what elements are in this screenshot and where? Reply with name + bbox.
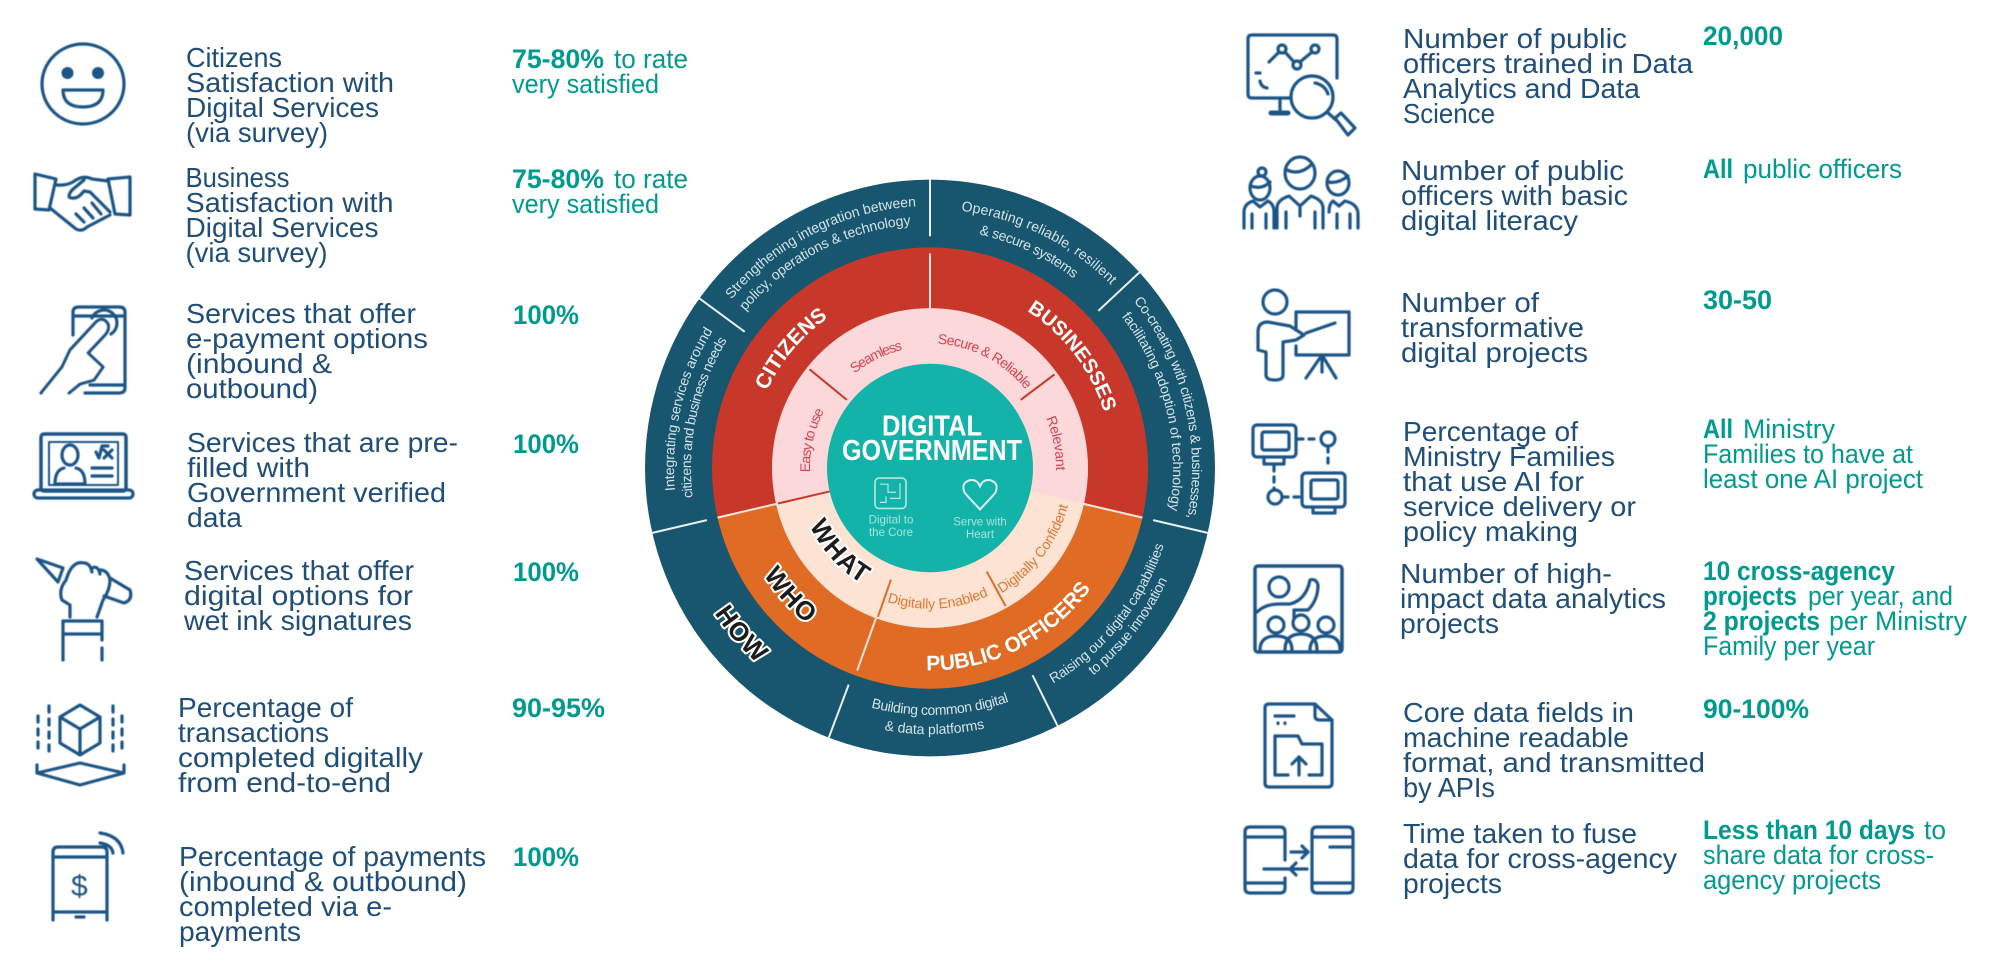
labels: what ring qualities: Easy to use	[800, 409, 823, 472]
value: less than 10 days: share data for cross-	[1703, 840, 1934, 870]
labels: navy ring how statements: Co-creating with citizens & businesses,	[1136, 297, 1202, 517]
heading: digital government	[842, 410, 1022, 466]
label: e-payments: payments	[179, 916, 301, 947]
value: 90-95%: 90-95%	[512, 693, 605, 723]
label: end-to-end transactions	[178, 692, 423, 798]
label: e-payment options: e-payment options	[186, 323, 428, 354]
icon: connected monitors	[1253, 425, 1345, 513]
labels: what ring qualities: Seamless	[850, 343, 902, 372]
label: machine readable data	[1403, 697, 1705, 803]
caption: serve with heart	[953, 517, 1007, 541]
value: 75-80%: very satisfied	[512, 189, 659, 219]
label: business satisfaction: (via survey)	[186, 237, 328, 268]
icon: file with folder upload	[1265, 704, 1332, 787]
ring: how (navy)	[645, 180, 1215, 756]
label: data fusion time: projects	[1403, 868, 1502, 899]
value: cross-agency projects: per Ministry	[1829, 606, 1967, 636]
label: officers trained: Science	[1403, 98, 1495, 129]
label: business satisfaction: Digital Services	[186, 212, 378, 243]
label: pre-filled services: filled with	[187, 452, 310, 483]
label: high-impact analytics: Number of high-	[1400, 558, 1612, 589]
value: cross-agency projects: 2 projects	[1703, 606, 1820, 636]
label: pre-filled services	[187, 427, 458, 533]
value: 75-80%: to rate	[614, 164, 688, 194]
label: business satisfaction	[186, 162, 394, 268]
label: officers trained	[1403, 23, 1693, 129]
labels: navy ring how statements: Strengthening integration between	[726, 199, 916, 298]
panel: wet ink signatures row	[37, 555, 579, 660]
value: cross-agency projects: Family per year	[1703, 631, 1875, 661]
icon: isometric cube	[37, 705, 124, 785]
panel: officers trained row	[1248, 21, 1783, 135]
label: citizens satisfaction: (via survey)	[186, 117, 328, 148]
label: wet ink signatures: wet ink signatures	[183, 605, 412, 636]
value: cross-agency projects: per year, and	[1808, 581, 1953, 611]
labels: what ring qualities: Digitally Enabled	[888, 586, 988, 612]
label: digital literacy: Number of public	[1401, 155, 1624, 186]
panel: right column of public officer and data measures	[1244, 21, 1967, 899]
label: AI use	[1403, 416, 1636, 547]
label: wet ink signatures: Services that offer	[184, 555, 414, 586]
heading: digital government: DIGITAL	[882, 410, 982, 442]
labels: what ring qualities	[800, 334, 1068, 612]
label: data fusion time: data for cross-agency	[1403, 843, 1677, 874]
ring: what, citizens and businesses (pink)	[772, 308, 1088, 628]
caption: serve with heart: Serve with	[953, 517, 1007, 529]
label: e-payment options: Services that offer	[186, 298, 416, 329]
icon: phone with dollar sign: $	[71, 870, 88, 903]
labels: navy ring how statements: policy, operations & technology	[740, 217, 910, 312]
labels: who ring audiences: PUBLIC OFFICERS	[928, 582, 1089, 670]
label: high-impact analytics: projects	[1400, 608, 1499, 639]
label: business satisfaction: Business	[186, 162, 290, 193]
value: all ministry families: Ministry	[1743, 414, 1835, 444]
label: end-to-end transactions: transactions	[178, 717, 329, 748]
label: pre-filled services: Government verified	[187, 477, 446, 508]
icon: monitor with magnifier	[1248, 35, 1355, 135]
value: 90-100%: 90-100%	[1703, 694, 1809, 724]
labels: navy ring how statements: to pursue innovation	[1088, 578, 1167, 674]
ring: who, public officers (orange)	[717, 468, 1143, 689]
panel: end-to-end transactions row	[37, 692, 605, 798]
label: end-to-end transactions: Percentage of	[178, 692, 353, 723]
panel: transformative projects row	[1258, 285, 1772, 380]
ring: who, citizens and businesses (red)	[712, 247, 1148, 689]
label: pre-filled services: Services that are pre-	[187, 427, 458, 458]
icon: hand holding pen	[37, 559, 131, 660]
value: 100%: 100%	[513, 557, 579, 587]
labels: what, who, how ring names: WHO	[764, 562, 817, 622]
value: all ministry families: Families to have at	[1703, 439, 1913, 469]
label: transformative projects	[1401, 287, 1588, 368]
panel: AI use row	[1253, 414, 1923, 547]
value: all ministry families: least one AI project	[1703, 464, 1923, 494]
value: 75-80%: 75-80%	[512, 44, 604, 74]
label: e-payment options: (inbound &	[186, 348, 332, 379]
value: 100%: 100%	[513, 300, 579, 330]
labels: navy ring how statements: citizens and business needs	[681, 338, 726, 498]
label: digital literacy: digital literacy	[1401, 205, 1578, 236]
label: officers trained: Analytics and Data	[1403, 73, 1640, 104]
label: wet ink signatures: digital options for	[184, 580, 413, 611]
caption: digital to the core	[869, 515, 913, 539]
labels: navy ring how statements: Building common digital	[872, 692, 1008, 718]
value: less than 10 days: agency projects	[1703, 865, 1881, 895]
value: less than 10 days: Less than 10 days	[1703, 815, 1915, 845]
label: machine readable data: Core data fields in	[1403, 697, 1634, 728]
icon: phone with dollar sign	[53, 833, 123, 920]
value: cross-agency projects	[1703, 556, 1967, 661]
value: 100%: 100%	[513, 429, 579, 459]
caption: serve with heart: Heart	[966, 529, 995, 541]
label: citizens satisfaction: Digital Services	[186, 92, 379, 123]
label: transformative projects: digital projects	[1401, 337, 1588, 368]
centre hub	[827, 364, 1033, 572]
panel: e-payments row	[53, 833, 579, 947]
label: e-payments	[179, 841, 486, 947]
caption: digital to the core: Digital to	[869, 515, 913, 527]
panel: data fusion time row	[1245, 815, 1946, 899]
panel: business satisfaction row	[35, 162, 688, 268]
label: e-payments: Percentage of payments	[179, 841, 486, 872]
label: high-impact analytics: impact data analytics	[1400, 583, 1666, 614]
icon: classroom	[1255, 566, 1342, 652]
labels: what, who, how ring names: HOW	[713, 602, 772, 662]
icon: finger touching phone	[41, 307, 125, 393]
labels: navy ring how statements: Integrating services around	[665, 326, 712, 490]
panel: pre-filled services row	[34, 427, 579, 533]
labels: navy ring how statements: & data platforms	[885, 721, 984, 738]
labels: who ring audiences: BUSINESSES	[1028, 300, 1116, 410]
panel: e-payment options row	[41, 298, 579, 404]
icon: three officers	[1244, 157, 1358, 228]
value: 75-80%: very satisfied	[512, 69, 659, 99]
labels: who ring audiences: CITIZENS	[756, 308, 826, 388]
labels: navy ring how statements: Raising our digital capabilities	[1049, 544, 1164, 683]
label: business satisfaction: Satisfaction with	[186, 187, 394, 218]
label: wet ink signatures	[183, 555, 414, 636]
label: officers trained: Number of public	[1403, 23, 1627, 54]
value: 75-80%: 75-80%	[512, 164, 604, 194]
labels: navy ring how statements	[665, 199, 1202, 738]
label: transformative projects: transformative	[1401, 312, 1584, 343]
label: end-to-end transactions: completed digitally	[178, 742, 423, 773]
value: 20,000: 20,000	[1703, 21, 1783, 51]
labels: what ring qualities: Relevant	[1046, 416, 1066, 470]
value: all public officers: public officers	[1743, 154, 1902, 184]
icon: smiling face	[42, 44, 124, 124]
label: e-payments: (inbound & outbound)	[179, 866, 467, 897]
label: end-to-end transactions: from end-to-end	[178, 767, 391, 798]
icon: laptop with person and formula	[34, 434, 133, 498]
value: 75-80%	[512, 164, 688, 219]
labels: who ring audiences	[756, 300, 1116, 670]
label: data fusion time: Time taken to fuse	[1403, 818, 1637, 849]
value: all ministry families: All	[1703, 414, 1733, 444]
label: high-impact analytics	[1400, 558, 1666, 639]
heading: digital government: GOVERNMENT	[842, 435, 1022, 466]
icon: digital to the core chip	[875, 478, 906, 508]
label: AI use: service delivery or	[1403, 491, 1636, 522]
label: AI use: Percentage of	[1403, 416, 1578, 447]
labels: navy ring how statements: Operating reliable, resilient	[962, 202, 1116, 285]
label: e-payment options	[186, 298, 428, 404]
label: citizens satisfaction: Satisfaction with	[186, 67, 394, 98]
icon: two phones exchanging data	[1245, 827, 1353, 893]
label: data fusion time	[1403, 818, 1677, 899]
label: citizens satisfaction: Citizens	[186, 42, 282, 73]
label: officers trained: officers trained in Data	[1403, 48, 1693, 79]
value: 75-80%: to rate	[614, 44, 688, 74]
chart: digital government concentric wheel	[645, 180, 1215, 756]
labels: what, who, how ring names	[713, 514, 874, 662]
value: 30-50: 30-50	[1703, 285, 1772, 315]
value: cross-agency projects: projects	[1703, 581, 1797, 611]
label: e-payment options: outbound)	[186, 373, 318, 404]
ring: what, public officers (peach)	[776, 468, 1084, 628]
label: citizens satisfaction	[186, 42, 394, 148]
panel: high-impact analytics row	[1255, 556, 1967, 661]
label: AI use: policy making	[1403, 516, 1578, 547]
labels: what, who, how ring names: WHAT	[810, 514, 874, 583]
value: cross-agency projects: 10 cross-agency	[1703, 556, 1895, 586]
label: machine readable data: machine readable	[1403, 722, 1629, 753]
panel: citizens satisfaction row	[42, 42, 688, 148]
caption: digital to the core: the Core	[869, 527, 913, 539]
panel: machine readable data row	[1265, 694, 1809, 803]
icon: heart	[963, 480, 997, 509]
label: digital literacy	[1401, 155, 1628, 236]
value: less than 10 days: to	[1924, 815, 1946, 845]
panel: digital literacy row	[1244, 154, 1902, 236]
label: transformative projects: Number of	[1401, 287, 1539, 318]
labels: what ring qualities: Secure & Reliable	[938, 334, 1030, 388]
ring separators	[652, 180, 1208, 738]
icon: handshake	[35, 174, 130, 230]
label: e-payments: completed via e-	[179, 891, 392, 922]
labels: navy ring how statements: facilitating adoption of technology	[1122, 312, 1184, 512]
panel: left column of citizen and business measures	[34, 42, 688, 947]
label: AI use: that use AI for	[1403, 466, 1584, 497]
labels: navy ring how statements: & secure systems	[980, 226, 1077, 278]
icon: presenter at board	[1258, 290, 1349, 380]
value: 75-80%	[512, 44, 688, 99]
value: 100%: 100%	[513, 842, 579, 872]
label: machine readable data: by APIs	[1403, 772, 1495, 803]
label: machine readable data: format, and transmitted	[1403, 747, 1705, 778]
label: pre-filled services: data	[187, 502, 242, 533]
labels: what ring qualities: Digitally Confident	[997, 504, 1068, 593]
label: digital literacy: officers with basic	[1401, 180, 1628, 211]
label: AI use: Ministry Families	[1403, 441, 1615, 472]
value: all ministry families	[1703, 414, 1923, 494]
value: less than 10 days	[1703, 815, 1946, 895]
value: all public officers: All	[1703, 154, 1733, 184]
